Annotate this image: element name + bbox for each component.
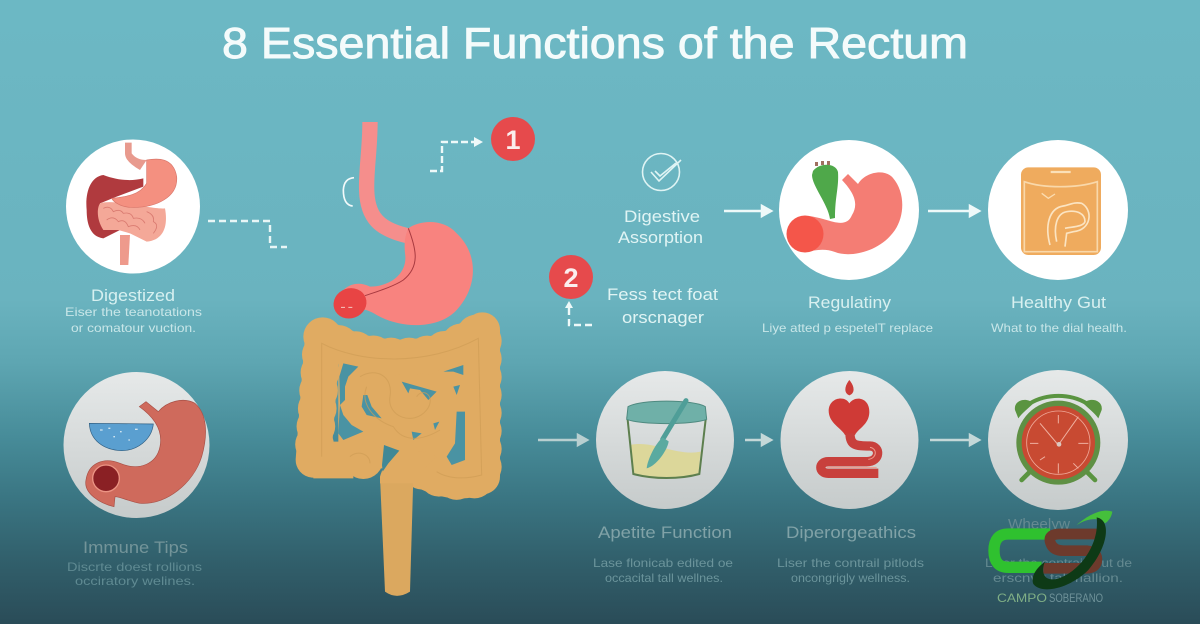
arrow: diperorgeathics to clock (930, 435, 979, 445)
panel: diperorgeathics (777, 371, 924, 585)
panel: clock (985, 370, 1132, 585)
icon: large and small intestine (313, 330, 482, 596)
text: digestive absorption: Digestive (624, 207, 700, 226)
text: fess tect foat: orscnager (622, 308, 704, 327)
text: immune tips description: Discrte doest rollions (67, 560, 202, 574)
arrow: intestine to apetite (538, 435, 587, 445)
text: digestized description: or comatour vuction. (71, 321, 196, 335)
arrow: regulating to healthy gut (928, 206, 979, 216)
logo: campo soberano (994, 511, 1112, 605)
text: apetite description: occacital tall wellnes. (605, 571, 723, 585)
heading: apetite function: Apetite Function (598, 523, 732, 542)
arrow: absorption to regulating (724, 206, 771, 216)
icon: check mark (642, 154, 681, 190)
panel: immune tips (64, 372, 210, 588)
icon: stomach and valve (779, 140, 919, 280)
icon: heart and tube (780, 371, 918, 509)
logo: campo soberano: SOBERANO (1049, 591, 1103, 605)
text: regulating description: Liye atted p espetelT replace (762, 321, 933, 335)
heading: digestized: Digestized (91, 286, 175, 305)
icon: digestive system (66, 140, 200, 274)
panel: digestized (65, 140, 202, 335)
icon: pylorus (329, 284, 371, 323)
panel: regulating (762, 140, 933, 335)
logo: campo soberano: CAMPO (997, 591, 1047, 605)
icon: gut card (988, 140, 1128, 280)
text: fess tect foat: Fess tect foat (607, 285, 718, 304)
panel: central organs (313, 122, 482, 596)
arrow: apetite to diperorgeathics (745, 435, 771, 445)
badge 1 (491, 117, 535, 161)
panel: apetite function (593, 371, 734, 585)
arrow: dashed to badge 1 (430, 137, 483, 171)
badge 1: 1 (505, 125, 521, 155)
text: healthy gut description: What to the dial health. (991, 321, 1127, 335)
icon: stomach and bowl (64, 372, 210, 518)
text: hidden clock label: erscnvy tal mallion. (993, 571, 1123, 585)
panel: healthy gut (988, 140, 1128, 335)
icon: esophagus (367, 122, 412, 237)
text: apetite description: Lase flonicab edited oe (593, 556, 733, 570)
heading: diperorgeathics: Diperorgeathics (786, 523, 916, 542)
bracket mark (343, 178, 354, 206)
icon: specimen cup (596, 371, 734, 509)
heading: regulating: Regulatiny (808, 293, 892, 312)
heading: immune tips: Immune Tips (83, 538, 188, 557)
icon: stomach (337, 222, 473, 325)
icon: alarm clock (988, 370, 1128, 510)
text: diperorgeathics description: Liser the contrail pitlods (777, 556, 924, 570)
text: hidden clock label: Liver the contrail fout de (985, 556, 1132, 570)
title: 8 Essential Functions of the Rectum (222, 19, 968, 68)
arrow: dashed connector left (208, 221, 287, 247)
heading: healthy gut: Healthy Gut (1011, 293, 1106, 312)
badge 2 (549, 255, 593, 299)
text: digestized description: Eiser the teanotations (65, 305, 202, 319)
text: immune tips description: occiratory welines. (75, 574, 195, 588)
arrow: dashed to badge 2 (565, 301, 596, 325)
badge 2: 2 (563, 263, 579, 293)
text: hidden clock label: Wheelyw (1008, 516, 1070, 533)
text: diperorgeathics description: oncongrigly wellness. (791, 571, 910, 585)
text: digestive absorption: Assorption (618, 228, 703, 247)
